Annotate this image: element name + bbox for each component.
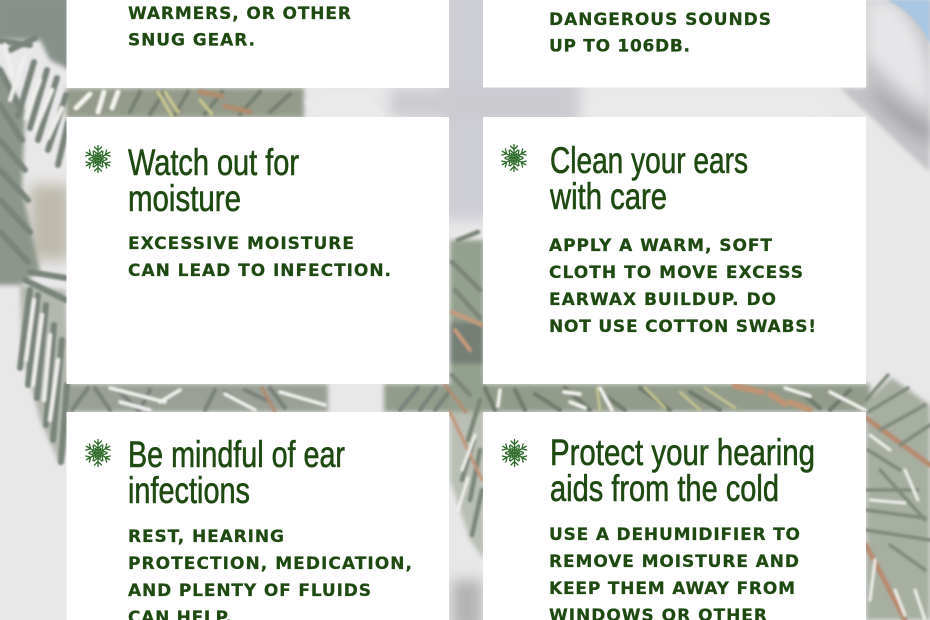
icon: snowflake [501,440,528,466]
heading: clean your ears with care: Clean your ears [550,140,748,181]
text: clean ears body: APPLY A WARM, SOFT [549,236,772,256]
snow clump in upper strip [304,92,385,117]
panel: top-left card [66,0,449,88]
heading: clean your ears with care [549,140,748,217]
text: warmers body: WARMERS, OR OTHER [128,4,351,24]
text: moisture body: EXCESSIVE MOISTURE [128,234,354,254]
pine tone blocks [0,0,70,40]
panel: top-right card [483,0,866,88]
heading: be mindful of ear infections: infections [128,470,250,511]
text: clean ears body [549,236,816,337]
text: clean ears body: NOT USE COTTON SWABS! [549,317,816,337]
text: dangerous sounds body: UP TO 106DB. [549,36,690,56]
text: dangerous sounds body [549,10,771,56]
icon: snowflake [84,146,112,172]
text: ear infections body: AND PLENTY OF FLUIDS [128,581,371,601]
text: ear infections body [128,527,412,620]
text: clean ears body: CLOTH TO MOVE EXCESS [549,263,803,283]
panel: watch out for moisture [66,117,449,384]
upper left strip [130,92,290,114]
heading: watch out for moisture: moisture [128,178,241,219]
heading: protect your hearing aids from the cold: Protect your hearing [550,432,815,473]
panel: clean your ears with care [483,117,866,384]
panel: be mindful of ear infections [66,412,449,620]
right pine [866,418,930,620]
heading: be mindful of ear infections [128,434,345,511]
heading: watch out for moisture [128,142,299,219]
centre strip [452,232,482,535]
text: ear infections body: REST, HEARING [128,527,284,547]
text: ear infections body: PROTECTION, MEDICATION, [128,554,412,574]
text: warmers body [128,4,351,50]
icon: snowflake [84,440,112,466]
heading: be mindful of ear infections: Be mindful of ear [128,434,345,475]
text: moisture body: CAN LEAD TO INFECTION. [128,261,391,281]
text: hearing aids body: USE A DEHUMIDIFIER TO [549,525,800,545]
panel: protect your hearing aids [483,412,866,620]
heading: clean your ears with care: with care [549,176,667,217]
heading: protect your hearing aids from the cold [550,432,815,509]
text: hearing aids body: REMOVE MOISTURE AND [549,552,799,572]
text: moisture body [128,234,391,281]
text: dangerous sounds body: DANGEROUS SOUNDS [549,10,771,30]
text: hearing aids body: KEEP THEM AWAY FROM [549,579,795,599]
text: clean ears body: EARWAX BUILDUP. DO [549,290,776,310]
snowball [840,0,930,172]
icon: snowflake [500,144,528,172]
text: warmers body: SNUG GEAR. [128,30,255,50]
heading: watch out for moisture: Watch out for [128,142,299,183]
sky corner [886,0,930,44]
heading: protect your hearing aids from the cold: aids from the cold [550,468,779,509]
lower right strip [485,388,850,410]
lower left strip [72,388,449,410]
text: hearing aids body [549,525,800,620]
